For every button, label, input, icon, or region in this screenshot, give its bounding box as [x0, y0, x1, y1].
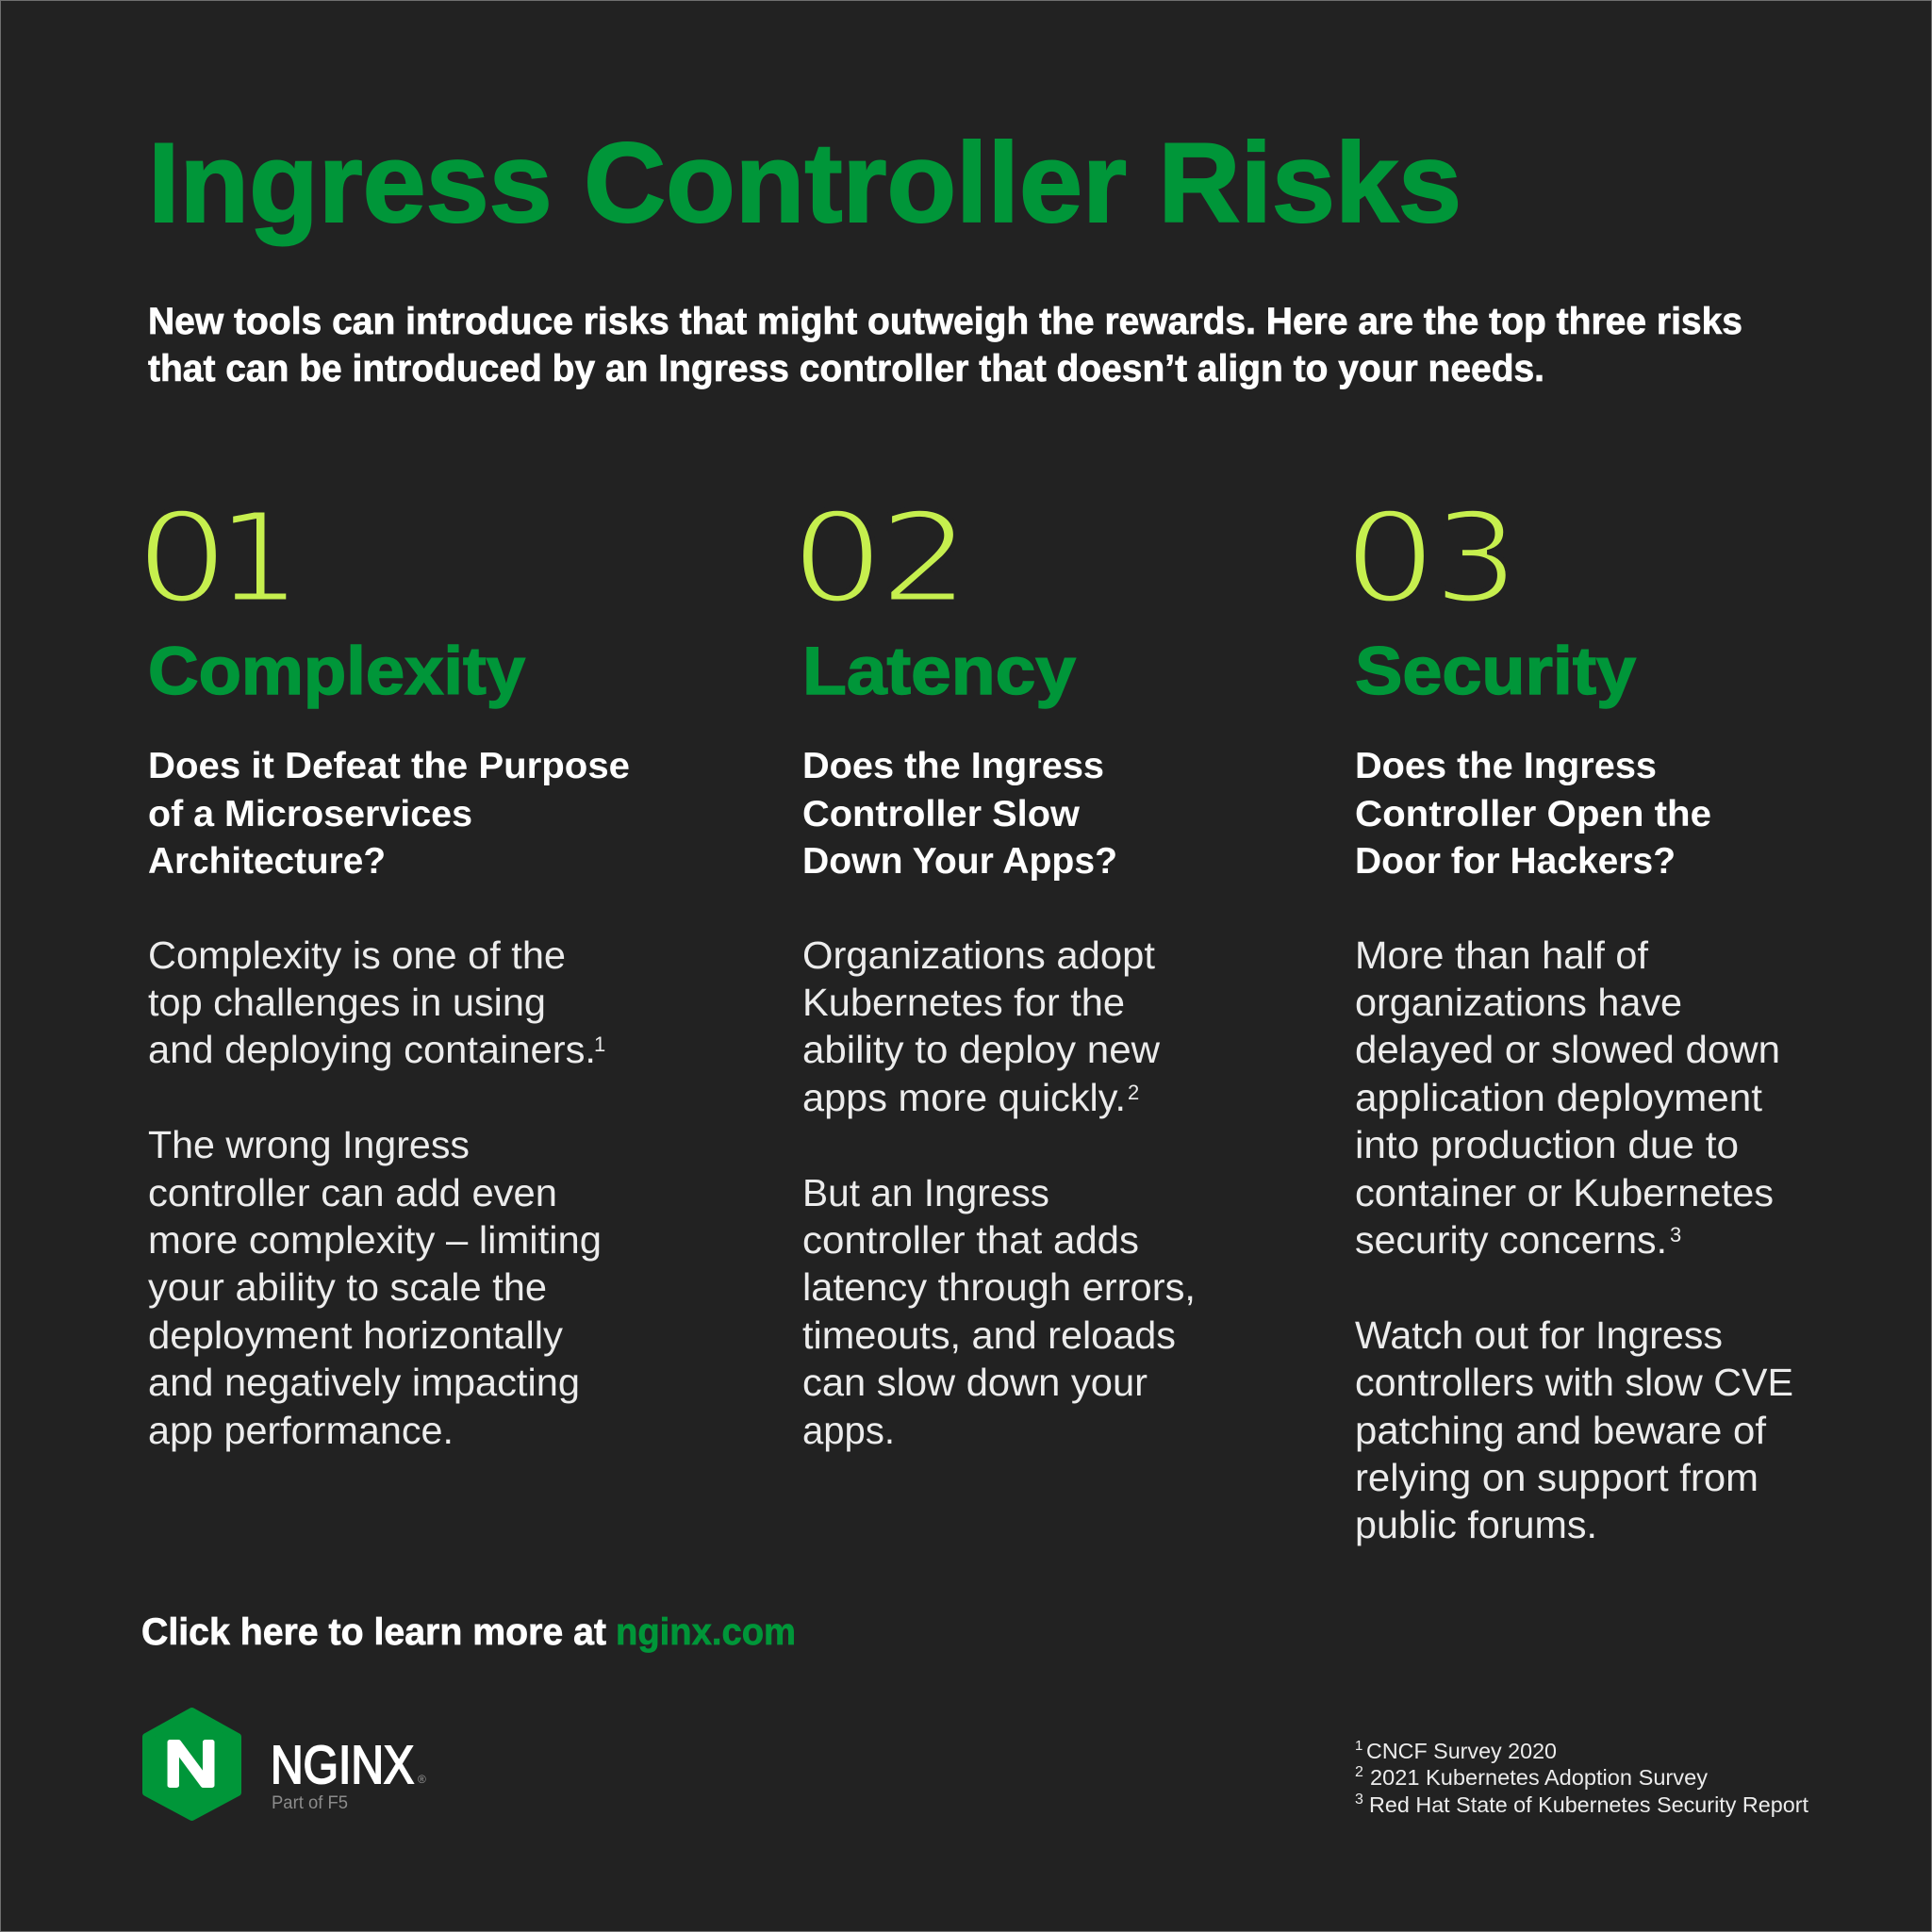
question: security — [1355, 746, 1711, 882]
body text: complexity: more complexity – limiting — [148, 1218, 602, 1262]
body text: complexity: your ability to scale the — [148, 1265, 547, 1309]
question: latency — [802, 746, 1117, 882]
question: security: Does the Ingress — [1355, 746, 1657, 786]
call to action: Click here to learn more at — [141, 1611, 606, 1653]
body text: latency: controller that adds — [802, 1218, 1139, 1262]
question: security: Controller Open the — [1355, 794, 1711, 834]
body text: complexity: and deploying containers. — [148, 1028, 596, 1071]
body text: complexity: app performance. — [148, 1409, 454, 1452]
footnotes: 2 — [1355, 1764, 1363, 1780]
body text: complexity: controller can add even — [148, 1171, 557, 1214]
body text: security: container or Kubernetes — [1355, 1171, 1774, 1214]
body text: latency: But an Ingress — [802, 1171, 1049, 1214]
body text: complexity: and negatively impacting — [148, 1361, 580, 1404]
question: latency: Controller Slow — [802, 794, 1081, 834]
question: security: Door for Hackers? — [1355, 841, 1676, 882]
body text: latency: 2 — [1128, 1081, 1139, 1104]
number 01: 0 — [136, 487, 228, 632]
panel: latency — [791, 487, 1196, 1452]
body text: security: public forums. — [1355, 1503, 1597, 1546]
body text: security: into production due to — [1355, 1123, 1739, 1166]
heading: complexity: Complexity — [148, 635, 526, 709]
icon: green hexagon with N — [146, 1711, 238, 1817]
body text: latency: Kubernetes for the — [802, 981, 1125, 1024]
body text: complexity: 1 — [594, 1032, 605, 1056]
body text: latency: Organizations adopt — [802, 933, 1156, 977]
body text: latency: latency through errors, — [802, 1265, 1196, 1309]
body text: security: application deployment — [1355, 1076, 1763, 1119]
body text: complexity: The wrong Ingress — [148, 1123, 470, 1166]
body text: complexity: top challenges in using — [148, 981, 546, 1024]
number 03: 3 — [1432, 487, 1519, 632]
body text: complexity: Complexity is one of the — [148, 933, 566, 977]
intro text: that can be introduced by an Ingress controller that doesn’t align to your needs. — [148, 348, 1544, 389]
question: latency: Down Your Apps? — [802, 841, 1117, 882]
body text: security — [1355, 933, 1793, 1546]
intro text — [148, 301, 1742, 389]
footnotes: Red Hat State of Kubernetes Security Report — [1369, 1792, 1809, 1817]
body text: security: security concerns. — [1355, 1218, 1667, 1262]
footnotes: 1 — [1355, 1738, 1362, 1754]
number 02 — [791, 487, 971, 632]
logo: NGINX Part of F5 — [146, 1711, 426, 1817]
footnotes — [1355, 1738, 1809, 1817]
call to action: nginx.com — [616, 1611, 796, 1653]
question: complexity: Does it Defeat the Purpose — [148, 746, 630, 786]
body text: security: Watch out for Ingress — [1355, 1313, 1723, 1357]
heading: security: Security — [1355, 635, 1637, 709]
footnotes: CNCF Survey 2020 — [1366, 1739, 1557, 1763]
body text: latency: apps. — [802, 1409, 895, 1452]
body text: latency: ability to deploy new — [802, 1028, 1160, 1071]
question: complexity — [148, 746, 630, 882]
title: Ingress Controller Risks — [148, 120, 1461, 246]
question: complexity: of a Microservices — [148, 794, 472, 834]
body text: security: controllers with slow CVE — [1355, 1361, 1793, 1404]
body text: complexity — [148, 933, 605, 1452]
question: complexity: Architecture? — [148, 841, 386, 882]
footnotes: 2021 Kubernetes Adoption Survey — [1370, 1765, 1709, 1790]
registered mark: ® — [418, 1773, 426, 1786]
body text: security: organizations have — [1355, 981, 1682, 1024]
intro text: New tools can introduce risks that might outweigh the rewards. Here are the top three risks — [148, 301, 1742, 342]
number 02: 2 — [878, 487, 971, 632]
footnotes: 3 — [1355, 1792, 1363, 1808]
body text: latency: timeouts, and reloads — [802, 1313, 1176, 1357]
heading: latency: Latency — [802, 635, 1077, 709]
body text: security: patching and beware of — [1355, 1409, 1767, 1452]
number 01: 1 — [216, 487, 301, 632]
number 03: 0 — [1344, 487, 1436, 632]
tagline: Part of F5 — [272, 1793, 348, 1813]
number 03 — [1344, 487, 1519, 632]
number 01 — [136, 487, 301, 632]
wordmark: NGINX — [271, 1735, 414, 1795]
panel: complexity — [136, 487, 630, 1452]
body text: security: More than half of — [1355, 933, 1649, 977]
body text: latency: apps more quickly. — [802, 1076, 1126, 1119]
body text: complexity: deployment horizontally — [148, 1313, 564, 1357]
body text: security: delayed or slowed down — [1355, 1028, 1780, 1071]
icon: green hexagon with N: N — [164, 1729, 218, 1799]
question: latency: Does the Ingress — [802, 746, 1104, 786]
body text: security: relying on support from — [1355, 1456, 1759, 1499]
panel: security — [1344, 487, 1793, 1546]
number 02: 0 — [791, 487, 883, 632]
body text: security: 3 — [1670, 1223, 1681, 1247]
body text: latency — [802, 933, 1196, 1452]
body text: latency: can slow down your — [802, 1361, 1148, 1404]
